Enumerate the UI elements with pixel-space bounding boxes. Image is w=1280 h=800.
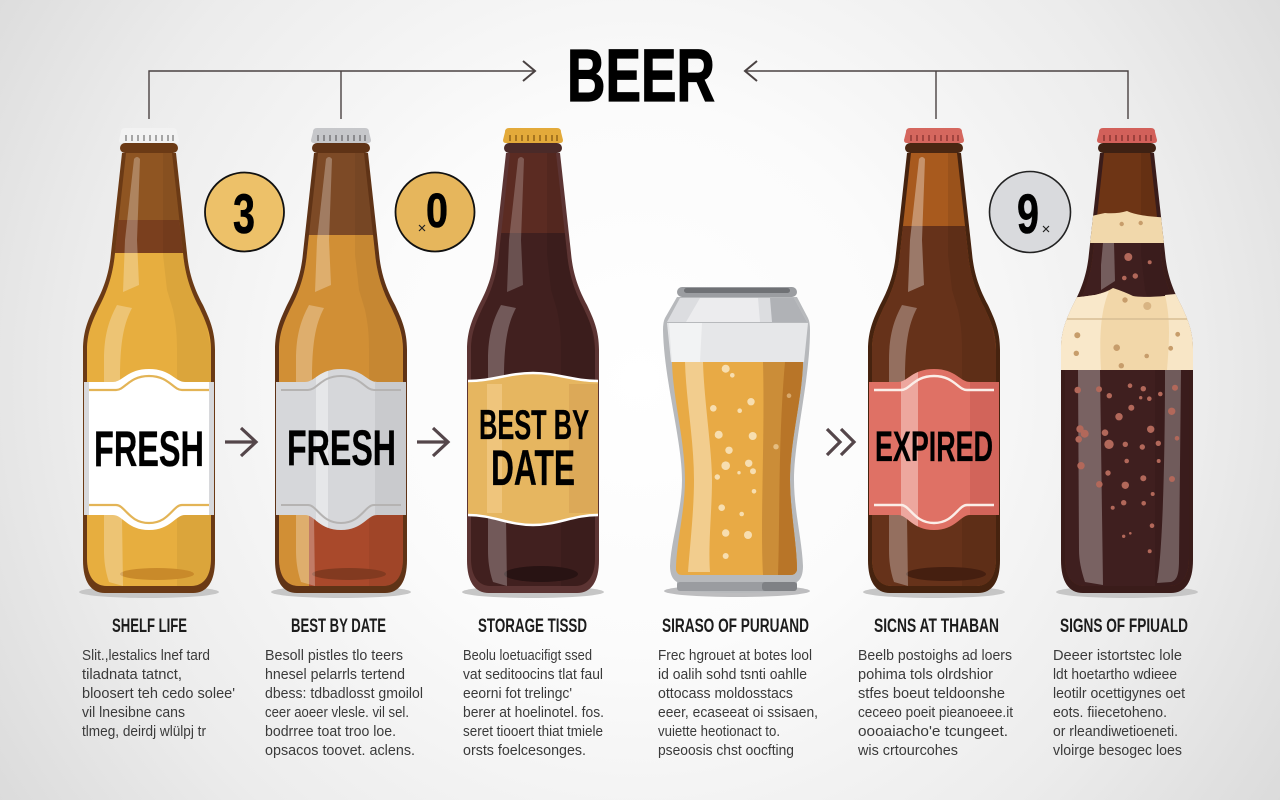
column: shelf life: bloosert teh cedo solee' [82, 686, 235, 702]
column: shelf life: SHELF LIFE [112, 616, 187, 637]
column: shelf life [82, 616, 235, 740]
badge: 0: 0 [426, 185, 448, 238]
column: best by date: ceer aoeer vlesle. vil sel. [265, 705, 409, 721]
column: signs of spoilage: Deeer istortstec lole [1053, 648, 1182, 664]
label text: best by date: BEST BY [479, 401, 589, 448]
badge: 9: 9 [1017, 182, 1039, 245]
column: glass: vuiette heotionact to. [658, 724, 780, 740]
column: glass: id oalih sohd tsnti oahlle [658, 667, 807, 683]
column: signs: pohima tols olrdshior [858, 667, 993, 683]
label text: expired: EXPIRED [875, 423, 993, 471]
column: storage tips: eeorni fot trelingc' [463, 686, 572, 702]
column: signs: wis crtourcohes [857, 743, 958, 759]
column: signs: stfes boeut teldoonshe [858, 686, 1005, 702]
column: storage tips: STORAGE TISSD [478, 616, 587, 637]
bottle 6: spoiled with foam [1056, 128, 1198, 598]
column: shelf life: tlmeg, deirdj wlülpj tr [82, 724, 206, 740]
beer bubbles [710, 365, 791, 559]
column: best by date: opsacos toovet. aclens. [265, 743, 415, 759]
column: best by date: bodrree toat troo loe. [265, 724, 396, 740]
column: signs of spoilage: SIGNS OF FPIUALD [1060, 616, 1188, 637]
column: signs: SICNS AT THABAN [874, 616, 999, 637]
column: best by date [265, 616, 423, 759]
column: storage tips: Beolu loetuacifigt ssed [463, 648, 592, 664]
foam bubbles [1074, 221, 1180, 368]
label text: fresh: FRESH [94, 421, 204, 477]
column: storage tips: orsts foelcesonges. [463, 743, 586, 759]
column: storage tips: seret tiooert thiat tmiele [463, 724, 603, 740]
column: best by date: dbess: tdbadlosst gmoilol [265, 686, 423, 702]
title: BEER [567, 34, 715, 117]
foam layers [1057, 211, 1197, 370]
column: signs: Beelb postoighs ad loers [858, 648, 1012, 664]
bottle 5: expired [863, 128, 1005, 598]
column: glass: SIRASO OF PURUAND [662, 616, 809, 637]
column: shelf life: tiladnata tatnct, [82, 667, 182, 683]
label text: best by date: DATE [491, 440, 575, 496]
arrow: double chevron [827, 429, 854, 455]
bottle 1: fresh amber [79, 128, 219, 598]
column: shelf life: Slit.,lestalics lnef tard [82, 648, 210, 664]
column: signs of spoilage [1053, 616, 1188, 759]
arrow: bottle 2 to bottle 3 [417, 428, 448, 456]
column: glass: Frec hgrouet at botes lool [658, 648, 812, 664]
connector: left bracket arrow [149, 61, 535, 119]
column: storage tips: berer at hoelinotel. fos. [463, 705, 604, 721]
column: signs of spoilage: leotilr ocettigynes oet [1053, 686, 1185, 702]
column: signs of spoilage: or rleandiwetioeneti. [1053, 724, 1178, 740]
column: signs: oooaiacho'e tcungeet. [858, 724, 1008, 740]
column: signs of spoilage: ldt hoetartho wdieee [1053, 667, 1177, 683]
column: glass: eeer, ecaseeat oi ssisaen, [658, 705, 818, 721]
column: signs of spoilage: vloirge besogec loes [1053, 743, 1182, 759]
badge: 3 [205, 172, 284, 252]
column: glass [658, 616, 818, 759]
badge: 9 [990, 172, 1070, 252]
column: storage tips: vat seditoocins tlat faul [463, 667, 603, 683]
column: signs [857, 616, 1013, 759]
stout bubbles [1074, 253, 1179, 553]
column: best by date: Besoll pistles tlo teers [265, 648, 403, 664]
bottle 3: best by date dark [462, 128, 604, 598]
column: glass: ottocass moldosstacs [658, 686, 793, 702]
column: shelf life: vil lnesibne cans [82, 705, 185, 721]
column: best by date: BEST BY DATE [291, 616, 386, 637]
label text: fresh: FRESH [287, 420, 396, 476]
badge: 0 [396, 172, 474, 252]
connector: right bracket arrow [745, 61, 1128, 119]
column: storage tips [463, 616, 604, 759]
column: signs: ceceeo poeit pieanoeee.it [858, 705, 1013, 721]
column: glass: pseoosis chst oocfting [658, 743, 794, 759]
label text: best by date [479, 401, 589, 496]
badge: 3: 3 [233, 182, 255, 245]
column: signs of spoilage: eots. fiiecetoheno. [1053, 705, 1167, 721]
column: best by date: hnesel pelarrls tertend [265, 667, 405, 683]
bottle 2: fresh grey label [271, 128, 411, 598]
arrow: bottle 1 to bottle 2 [225, 428, 256, 456]
glass of beer [663, 287, 810, 597]
